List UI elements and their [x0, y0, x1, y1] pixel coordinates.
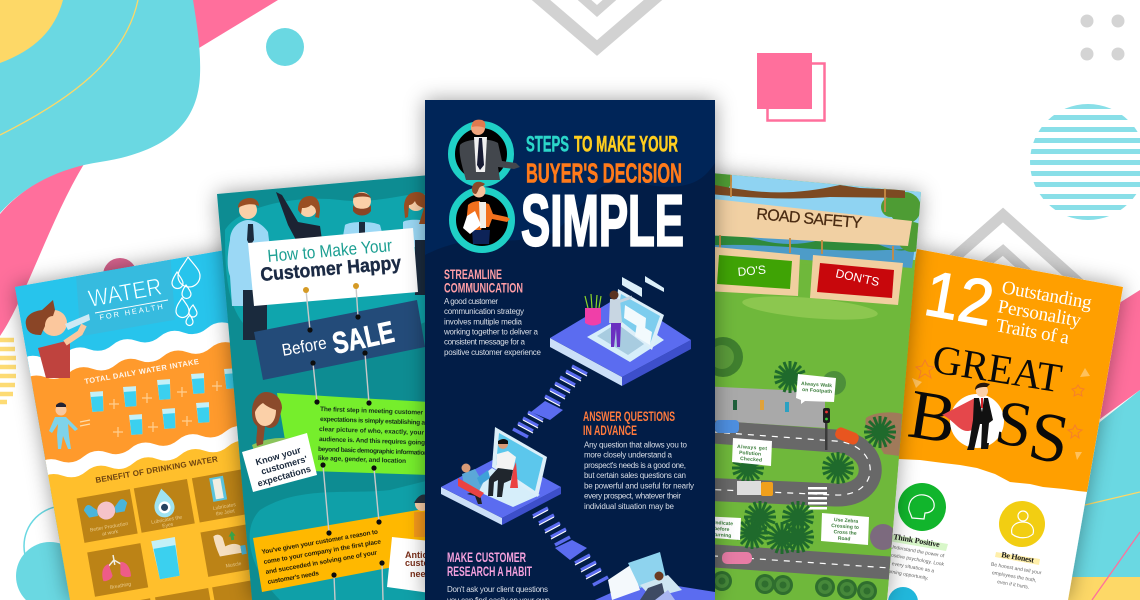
lighter teal blobs	[225, 194, 425, 330]
outstanding personality traits: Personality	[996, 296, 1083, 332]
footpath	[700, 386, 825, 428]
cyan blob	[0, 0, 200, 213]
stairs upper	[513, 366, 587, 437]
section 2 heading: ANSWER QUESTIONS	[583, 408, 675, 424]
do's button	[717, 255, 792, 289]
tile: better production	[77, 489, 138, 543]
tile: eyes: Lubricates the	[151, 514, 183, 526]
boy drinking water	[26, 300, 90, 378]
panel: how to make your customer happy infographic	[225, 192, 425, 600]
section 2 body: be powerful and useful for nearly	[584, 482, 694, 490]
green band text: The first step in meeting customer	[320, 406, 424, 417]
tile: better production: at work	[102, 529, 119, 538]
trees top corners	[712, 170, 927, 252]
SS of boss: S	[991, 386, 1038, 462]
callout: footpath	[796, 374, 836, 404]
white wave lower	[46, 426, 238, 488]
know your customers text	[254, 445, 312, 489]
section 1 heading: STREAMLINE	[444, 266, 502, 282]
O circle backdrop	[950, 394, 1004, 448]
dark base	[425, 100, 715, 600]
tile: joint	[192, 470, 245, 522]
section 3 heading: RESEARCH A HABIT	[447, 563, 532, 579]
section 2 body: more closely understand a	[584, 450, 673, 460]
white wave	[27, 322, 230, 386]
section 2 body: every prospect, whatever their	[584, 492, 681, 500]
know your customers text: expectations	[256, 464, 312, 489]
number 12: 12	[920, 257, 999, 340]
callout: indicate: turning	[714, 532, 731, 539]
cyan circle	[266, 28, 304, 66]
green band text: clear picture of who, exactly, your	[319, 426, 425, 437]
don'ts board	[810, 255, 903, 305]
grey dots	[1080, 14, 1124, 60]
yellow band text: You've given your customer a reason to	[261, 529, 379, 556]
yellow blob	[0, 0, 63, 63]
businesswoman	[463, 182, 510, 244]
person figure	[49, 402, 78, 449]
yellow band text: and succeeded in solving one of your	[265, 549, 378, 576]
yellow benefits band	[48, 441, 250, 600]
tile: joint: the Joint	[216, 508, 236, 517]
section 2 heading: IN ADVANCE	[583, 422, 637, 438]
person in white shirt	[488, 439, 516, 497]
section 3 body	[447, 585, 550, 600]
panel: water for health infographic	[15, 250, 252, 600]
callout: zebra: Crossing to	[831, 523, 859, 531]
be honest body: employees the truth,	[991, 570, 1037, 584]
before sale banner	[254, 300, 425, 380]
background: top chevrons	[534, 0, 660, 48]
row 3 tiles	[140, 580, 252, 600]
card shadow: customer	[217, 175, 430, 600]
yellow text band	[253, 508, 430, 592]
lower road	[700, 555, 890, 568]
blue icon blob	[888, 587, 918, 600]
be honest body: Be honest and tell your	[990, 562, 1042, 576]
right side colour shapes	[1050, 290, 1140, 600]
tile: breathing: Breathing	[110, 581, 132, 591]
rocks	[864, 412, 902, 550]
round bushes	[712, 571, 877, 600]
callout: pollution	[732, 438, 772, 466]
isometric platform 2	[441, 427, 561, 525]
section 3 heading	[447, 549, 532, 579]
woman right	[403, 192, 425, 295]
think positive body	[884, 544, 945, 582]
person	[609, 299, 622, 323]
tile: better production: Better Production	[90, 521, 129, 534]
callout: zebra: Road	[838, 536, 851, 542]
title line 1: TO MAKE YOUR	[574, 132, 678, 156]
think positive body: learning opportunity.	[884, 568, 929, 582]
callout: pollution: Always get	[737, 444, 768, 452]
yellow icon blob	[999, 501, 1045, 547]
panel: road safety infographic	[680, 170, 927, 600]
outstanding personality traits: Outstanding	[1000, 277, 1094, 314]
callout: zebra: Use Zebra	[834, 517, 859, 525]
intake heading: TOTAL DAILY WATER INTAKE	[84, 357, 200, 386]
hanging strings and pins	[303, 283, 385, 600]
outstanding personality traits	[994, 277, 1094, 349]
callout: indicate: before	[714, 526, 730, 533]
title line 1: STEPS	[526, 132, 569, 156]
be honest label: Be Honest	[1001, 550, 1035, 565]
sale text: SALE	[330, 316, 397, 361]
tablet	[477, 470, 490, 485]
road safety title: ROAD SAFETY	[756, 206, 863, 232]
section 2 body: but certain sales questions can	[584, 471, 686, 480]
do's label: DO'S	[737, 263, 766, 279]
B of boss: B	[903, 376, 962, 459]
tile: joint: Lubricates	[212, 502, 237, 512]
don'ts label: DON'TS	[834, 266, 881, 289]
striped cyan circle	[1030, 104, 1140, 221]
section 3 body: Don't ask your client questions	[447, 585, 548, 594]
section 1 heading: COMMUNICATION	[444, 280, 523, 296]
dark pink half circle	[103, 258, 137, 292]
section 1 body: consistent message for a	[444, 338, 526, 346]
title line 2: BUYER'S DECISION	[526, 158, 682, 188]
isometric platform 1	[550, 276, 691, 386]
section 2 body: Any question that allows you to	[584, 440, 688, 450]
section 2 body: individual situation may be	[584, 502, 675, 511]
SS of boss	[991, 386, 1075, 480]
section 1 body: working together to deliver a	[443, 328, 539, 336]
businessman	[460, 120, 520, 180]
title sign	[248, 228, 418, 306]
card shadow: water	[15, 244, 320, 600]
anticipate text	[405, 550, 453, 579]
tile: eyes: Eyes	[162, 522, 174, 530]
icon: big water glass	[151, 537, 182, 580]
pink line	[1092, 532, 1140, 600]
speech bubbles	[622, 277, 642, 297]
be honest body	[990, 562, 1042, 591]
title plate	[76, 260, 175, 336]
laptop	[587, 314, 664, 362]
callout: footpath: on Footpath	[802, 387, 832, 395]
pink cup	[585, 308, 601, 326]
green band text: beyond basic demographic information	[318, 446, 428, 457]
callout: indicate	[700, 516, 741, 540]
river and bushes	[700, 233, 915, 268]
yellow striped circle	[0, 340, 16, 402]
callout: zebra	[821, 513, 869, 545]
plus signs	[109, 381, 222, 437]
red chair left	[458, 478, 484, 498]
red chair	[510, 462, 518, 488]
zebra crossing	[808, 487, 827, 510]
callout: pollution: Checked	[740, 456, 762, 464]
lighter navy header shape	[425, 100, 715, 255]
vehicles	[715, 400, 860, 564]
green band text: audience is. And this requires going	[319, 436, 425, 447]
section 2 body	[584, 440, 694, 511]
grass	[680, 257, 920, 600]
tile: muscle: Muscle	[225, 561, 242, 570]
person top right	[414, 495, 430, 537]
yellow band text: come to your company in the first place	[263, 538, 382, 566]
panel: great boss infographic	[870, 240, 1130, 600]
isometric platform 3	[595, 552, 715, 600]
title simple: SIMPLE	[521, 182, 684, 262]
woman holding sign	[252, 392, 296, 451]
icon: water drops	[172, 257, 200, 326]
green band text	[318, 406, 428, 465]
think positive body: at every situation as a	[886, 560, 935, 574]
triangle decorations	[912, 368, 1090, 460]
do's board	[705, 246, 800, 296]
anticipate text: needs	[410, 569, 436, 579]
anticipate text: customer's	[405, 558, 453, 568]
lighter grass	[741, 292, 879, 324]
green band text: like age, gender, and location	[318, 455, 406, 465]
man left	[228, 198, 271, 340]
background: yellow and cyan blobs top left	[0, 0, 304, 600]
winding road	[700, 431, 870, 495]
laptop	[468, 468, 540, 507]
woman waving	[276, 192, 322, 240]
section 1 body: involves multiple media	[444, 318, 523, 326]
SS of boss: S	[1023, 397, 1075, 480]
number eight rings	[452, 120, 520, 250]
anticipate text: Anticipate	[405, 550, 449, 560]
water glasses	[90, 368, 238, 435]
right side chevron behind card	[945, 215, 1080, 288]
road safety board	[705, 198, 912, 246]
sign title line 2: Customer Happy	[260, 253, 402, 286]
know your customers sign	[242, 433, 317, 492]
orange header	[870, 240, 1130, 492]
man bearded	[343, 192, 382, 234]
know your customers text: customers'	[260, 454, 308, 476]
section 2 body: prospect's needs is a good one,	[584, 461, 686, 470]
large trees	[703, 337, 854, 554]
tile: eyes	[134, 479, 195, 533]
green icon blob	[898, 483, 946, 531]
superhero boss	[942, 383, 993, 450]
equals sign	[80, 420, 90, 426]
stairs lower	[533, 508, 608, 585]
be honest body: even if it hurts.	[997, 579, 1030, 591]
yellow band text: customer's needs	[267, 570, 320, 586]
road markings	[700, 431, 890, 568]
think positive body: positive psychology. Look	[888, 552, 945, 568]
anticipate sign	[387, 537, 430, 593]
group of people	[228, 192, 430, 340]
traffic light	[823, 408, 830, 450]
card shadow: main	[425, 100, 715, 600]
section 1 body: communication strategy	[444, 307, 524, 316]
section 1 body: positive customer experience	[444, 348, 542, 357]
pink triangle top	[190, 0, 278, 48]
section 1 body	[443, 297, 542, 357]
callout: indicate: Indicate	[714, 520, 733, 527]
section 3 heading: MAKE CUSTOMER	[447, 549, 526, 565]
person in blue shirt	[462, 464, 483, 504]
don'ts button	[817, 263, 894, 298]
callout: zebra: Cross the	[833, 529, 857, 537]
sign title line 1: How to Make Your	[267, 235, 393, 266]
outstanding personality traits: Traits of a	[994, 315, 1071, 349]
yellow shape right	[1050, 577, 1140, 600]
section 1 body: A good customer	[444, 297, 498, 306]
card shadow: road	[680, 172, 921, 600]
blue header band	[15, 250, 222, 380]
yellow curved line	[0, 0, 138, 135]
pink swoosh left	[0, 164, 84, 336]
tile: muscle	[200, 524, 250, 577]
pink overlapping squares	[757, 53, 824, 120]
benefits heading: BENEFIT OF DRINKING WATER	[95, 455, 219, 485]
card shadow: boss	[855, 249, 1123, 600]
section 1 heading	[444, 266, 523, 296]
know your customers text: Know your	[254, 445, 302, 467]
great text: GREAT	[930, 335, 1065, 401]
log	[710, 184, 905, 198]
orange water intake band	[30, 342, 237, 474]
star decorations	[916, 360, 1084, 438]
callout: footpath: Always Walk	[801, 381, 832, 389]
green text band	[277, 393, 430, 475]
ropes	[720, 175, 893, 260]
callout: pollution: Pollution	[739, 450, 761, 458]
yellow band text	[261, 529, 382, 586]
cyan shape right	[1050, 390, 1140, 577]
yellow line	[1085, 492, 1140, 505]
section 2 heading	[583, 408, 675, 438]
pink shape right	[1085, 290, 1140, 430]
think positive body: Understand the power of	[890, 544, 945, 560]
green band text: expectations is simply establishing a	[320, 416, 425, 427]
sky	[700, 170, 925, 260]
before text: Before	[280, 333, 328, 360]
title line 1	[526, 132, 678, 156]
cyan circle bottom left	[16, 542, 84, 600]
cyan outline circle	[24, 506, 104, 586]
title underline	[95, 300, 168, 313]
think positive label: Think Positive	[893, 532, 941, 549]
panel: 8 steps main infographic	[425, 100, 715, 600]
tile: breathing	[87, 543, 148, 597]
water title: WATER	[86, 273, 164, 313]
subtitle: FOR HEALTH	[99, 302, 163, 322]
